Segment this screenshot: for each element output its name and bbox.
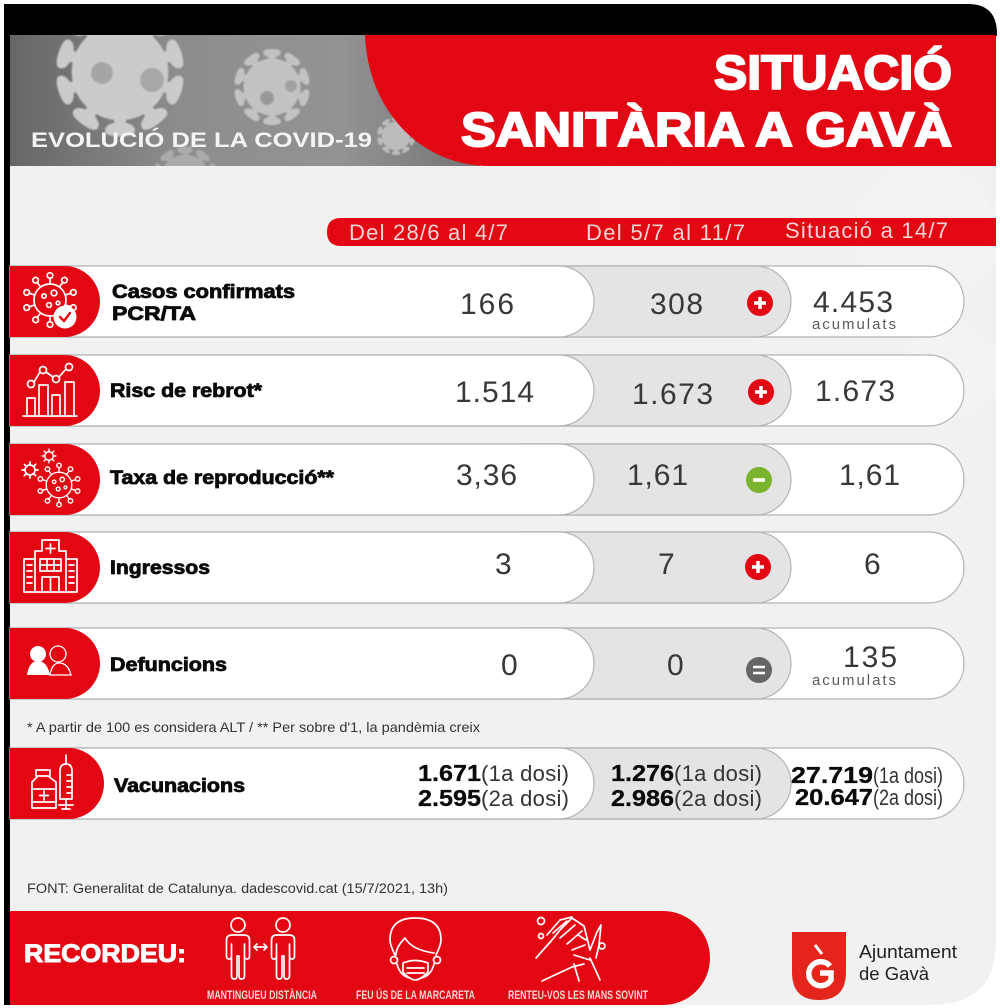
reminder bar: MANTINGUEU DISTÀNCIA <box>207 987 317 1002</box>
row: casos confirmats: 4.453 <box>813 286 893 319</box>
row: defuncions: 0 <box>667 649 684 682</box>
title: SITUACIÓ <box>714 45 952 100</box>
row: risc de rebrot: 1.673 <box>632 378 713 411</box>
row: casos confirmats: 308 <box>650 288 703 321</box>
logo: Ajuntament de Gavà: de Gavà <box>859 964 930 984</box>
logo shield <box>792 932 846 1000</box>
title <box>461 45 952 157</box>
column header band <box>327 218 996 246</box>
row: ingressos <box>10 532 964 603</box>
row: casos confirmats <box>10 266 964 337</box>
logo: Ajuntament de Gavà <box>792 932 957 1000</box>
row: risc de rebrot: 1.673 <box>815 375 895 408</box>
banner: grey virus image <box>10 35 480 166</box>
row: ingressos: Ingressos <box>110 558 210 579</box>
icon: washing hands <box>536 917 605 981</box>
banner subtitle: EVOLUCIÓ DE LA COVID-19 <box>31 128 372 152</box>
column header band: Del 5/7 al 11/7 <box>586 220 745 245</box>
row: vacunacions: 27.719 <box>791 762 873 788</box>
row: vacunacions: 1.671 <box>418 760 481 786</box>
source line: FONT: Generalitat de Catalunya. dadescovid.cat (15/7/2021, 13h) <box>27 881 448 896</box>
row: risc de rebrot: 1.514 <box>455 376 534 409</box>
title panel <box>365 35 996 166</box>
row: ingressos: 6 <box>864 548 881 581</box>
row: vacunacions: 2.595 <box>418 785 481 811</box>
row: casos confirmats: acumulats <box>812 316 896 333</box>
icon: plus badge <box>745 554 771 580</box>
row: vacunacions: Vacunacions <box>114 776 245 797</box>
row: defuncions: 0 <box>501 649 518 682</box>
footnote: * A partir de 100 es considera ALT / ** Per sobre d'1, la pandèmia creix <box>27 719 480 735</box>
row: vacunacions: (2a dosi) <box>873 785 943 810</box>
reminder bar <box>10 911 710 1005</box>
reminder bar: FEU ÚS DE LA MARCARETA <box>356 987 475 1002</box>
icon: vial and syringe <box>32 755 73 809</box>
column header band: Del 28/6 al 4/7 <box>349 220 508 245</box>
icon: keep distance <box>226 918 294 979</box>
row: vacunacions: 1.276 <box>611 760 674 786</box>
row: vacunacions: (2a dosi) <box>674 786 762 811</box>
icon: hospital <box>24 540 77 592</box>
title: SANITÀRIA A GAVÀ <box>461 103 952 157</box>
icon: plus badge <box>747 290 773 316</box>
row: taxa de reproduccio: 1,61 <box>839 459 900 492</box>
icon: minus badge <box>746 467 772 493</box>
row: taxa de reproduccio: 1,61 <box>627 459 688 492</box>
icon: plus badge <box>748 379 774 405</box>
icon: bar and line chart <box>23 364 77 416</box>
icon: equal badge <box>746 657 772 683</box>
row: taxa de reproduccio: Taxa de reproducció** <box>110 468 335 489</box>
reminder bar: RENTEU-VOS LES MANS SOVINT <box>508 988 648 1002</box>
row: vacunacions: (1a dosi) <box>674 761 762 786</box>
row: taxa de reproduccio <box>10 444 964 515</box>
column header band: Situació a 14/7 <box>785 218 948 243</box>
reminder bar: RECORDEU: <box>24 940 186 968</box>
row: defuncions: 135 <box>843 641 897 674</box>
row: vacunacions <box>10 748 964 819</box>
row: vacunacions: 2.986 <box>611 785 674 811</box>
icon: virus with check <box>23 273 77 328</box>
row: casos confirmats: 166 <box>460 288 514 321</box>
row: defuncions: acumulats <box>812 672 896 689</box>
row: ingressos: 3 <box>495 548 512 581</box>
icon: reproduction virus <box>22 449 80 507</box>
row: vacunacions: (1a dosi) <box>873 763 943 788</box>
row: casos confirmats: PCR/TA <box>112 304 196 325</box>
row: taxa de reproduccio: 3,36 <box>456 459 517 492</box>
row: risc de rebrot <box>10 355 964 426</box>
icon: two people <box>27 646 71 675</box>
row: casos confirmats: Casos confirmats <box>112 282 295 303</box>
row: ingressos: 7 <box>658 548 675 581</box>
row: defuncions: Defuncions <box>110 655 227 676</box>
row: vacunacions: (1a dosi) <box>481 761 569 786</box>
row: vacunacions: 20.647 <box>795 784 873 810</box>
row: defuncions <box>10 628 964 699</box>
row: vacunacions: (2a dosi) <box>481 786 569 811</box>
row: risc de rebrot: Risc de rebrot* <box>110 381 263 402</box>
icon: face mask <box>390 918 441 980</box>
logo: Ajuntament de Gavà: Ajuntament <box>859 942 957 962</box>
